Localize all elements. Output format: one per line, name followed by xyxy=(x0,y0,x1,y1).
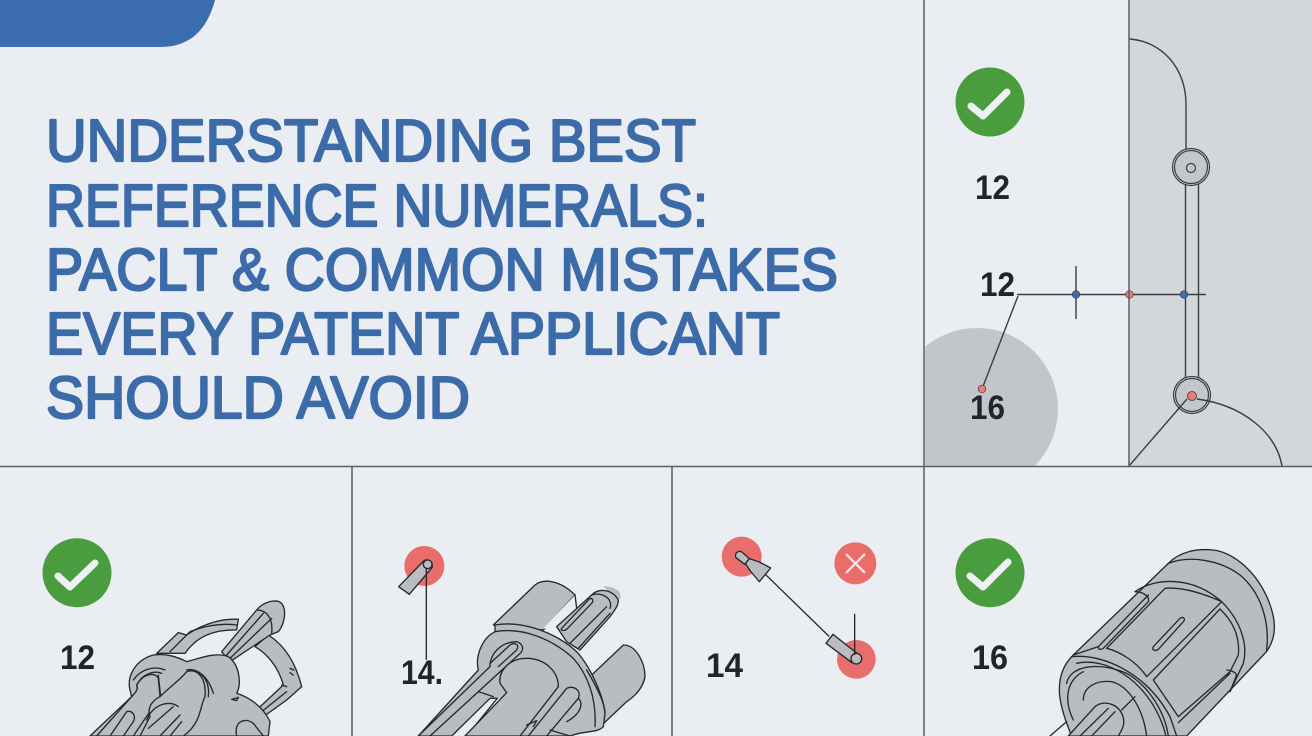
icon: check top right xyxy=(956,68,1024,136)
panel: bottom 4 xyxy=(956,538,1274,736)
upper curved arm xyxy=(1129,39,1186,150)
grey circle xyxy=(925,328,1058,466)
label 14.: 14. xyxy=(401,654,443,692)
machine drawing 1 xyxy=(90,601,302,736)
leader lines xyxy=(982,266,1206,389)
panel: bottom 1 xyxy=(42,538,302,736)
panel: bottom 2 xyxy=(399,546,645,736)
icon: check xyxy=(42,538,112,607)
icon: red cross xyxy=(834,542,876,584)
label 16: 16 xyxy=(972,639,1008,677)
label 12: 12 xyxy=(60,639,95,677)
label 12 middle: 12 xyxy=(980,266,1015,304)
upper pivot xyxy=(1172,148,1210,186)
title: SHOULD AVOID xyxy=(46,365,470,431)
machine drawing 2 xyxy=(418,581,645,736)
leader dots xyxy=(978,291,1188,393)
connecting rod xyxy=(1186,184,1198,379)
title: EVERY PATENT APPLICANT xyxy=(46,301,780,367)
title: REFERENCE NUMERALS: xyxy=(46,173,708,239)
label 12 top: 12 xyxy=(975,169,1010,207)
leader line xyxy=(765,574,829,636)
label 16 middle: 16 xyxy=(970,389,1005,427)
icon: red marker lower xyxy=(826,614,876,679)
icon: red marker upper xyxy=(722,537,771,582)
icon: check xyxy=(956,538,1024,607)
machine drawing 3 xyxy=(1050,550,1274,736)
blue corner tab xyxy=(0,0,215,47)
title xyxy=(46,108,838,431)
panel: bottom 3 xyxy=(722,537,876,679)
panel: top right drawing xyxy=(925,0,1312,466)
grey backdrop of drawing xyxy=(1129,0,1312,466)
icon: red marker xyxy=(399,546,444,659)
title: PACLT & COMMON MISTAKES xyxy=(46,237,838,303)
title: UNDERSTANDING BEST xyxy=(46,108,696,174)
lower pivot xyxy=(1174,376,1210,414)
lower lines xyxy=(1129,399,1282,466)
label 14: 14 xyxy=(706,647,743,685)
